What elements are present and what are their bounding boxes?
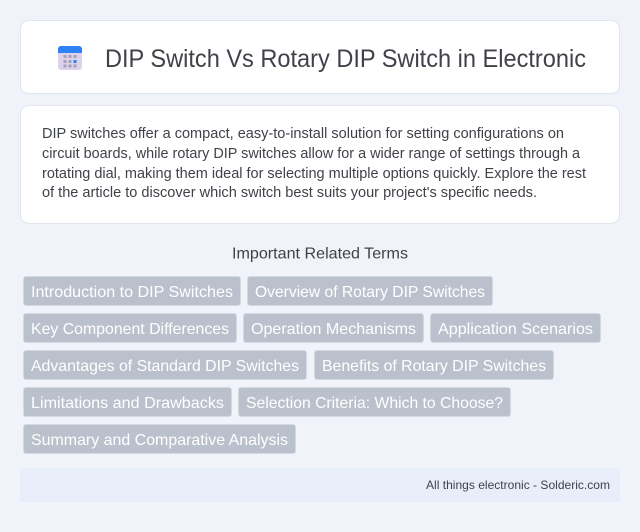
tag: Benefits of Rotary DIP Switches bbox=[322, 358, 546, 375]
tag bbox=[238, 388, 510, 416]
tag: Selection Criteria: Which to Choose? bbox=[246, 395, 503, 412]
description text bbox=[42, 126, 586, 201]
tag: Introduction to DIP Switches bbox=[31, 284, 233, 301]
tag bbox=[24, 314, 236, 342]
panel: description bbox=[20, 106, 620, 224]
tag bbox=[24, 276, 240, 306]
tag: Advantages of Standard DIP Switches bbox=[31, 358, 299, 375]
tag: Application Scenarios bbox=[438, 321, 593, 338]
icon: calendar grid bbox=[58, 46, 82, 70]
footer credit: All things electronic - Solderic.com bbox=[426, 478, 610, 492]
tag bbox=[24, 350, 306, 380]
description text: rotating dial, making them ideal for selecting multiple options quickly. Explore the rest bbox=[42, 166, 586, 182]
title: DIP Switch Vs Rotary DIP Switch in Electronic bbox=[105, 45, 586, 73]
tag list bbox=[24, 276, 600, 454]
tag: Summary and Comparative Analysis bbox=[31, 432, 288, 449]
description text: DIP switches offer a compact, easy-to-install solution for setting configurations on bbox=[42, 126, 564, 142]
tag bbox=[24, 424, 296, 454]
heading: related terms: Important Related Terms bbox=[232, 246, 408, 262]
tag bbox=[430, 314, 600, 342]
tag bbox=[248, 276, 492, 306]
tag: Operation Mechanisms bbox=[251, 321, 416, 338]
description text: circuit boards, while rotary DIP switches allow for a wider range of settings through a bbox=[42, 146, 581, 162]
tag: Key Component Differences bbox=[31, 321, 229, 338]
footer bbox=[20, 468, 620, 502]
tag: Overview of Rotary DIP Switches bbox=[255, 284, 485, 301]
tag: Limitations and Drawbacks bbox=[31, 395, 224, 412]
tag bbox=[314, 350, 554, 380]
description text: of the article to discover which switch best suits your project's specific needs. bbox=[42, 185, 537, 201]
tag bbox=[24, 388, 232, 416]
title panel bbox=[20, 20, 620, 94]
tag bbox=[244, 314, 424, 342]
